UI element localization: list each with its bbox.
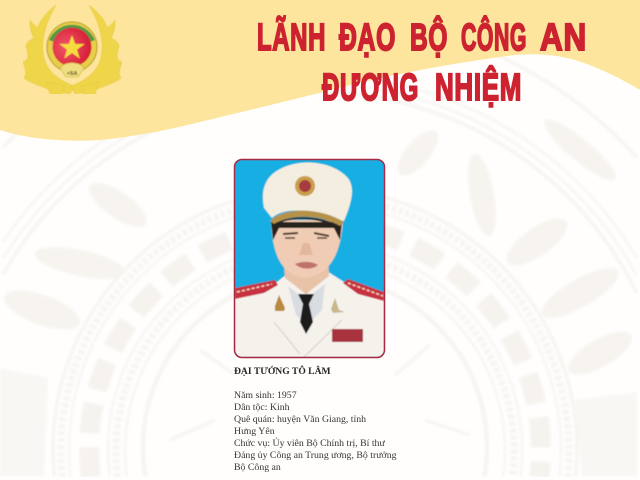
photo backdrop (234, 160, 384, 358)
photo border (234, 160, 384, 358)
title line 1: BỘ (410, 14, 448, 59)
biography text: Dân tộc: Kinh (234, 402, 290, 413)
title line 1: AN (540, 17, 587, 59)
name heading: ĐẠI TƯỚNG TÔ LÂM (234, 366, 331, 377)
biography text: Bộ Công an (234, 462, 281, 473)
cap badge (295, 176, 315, 196)
neck (283, 266, 330, 294)
nose and mouth (299, 243, 313, 255)
title line 1: LÃNH (257, 15, 326, 59)
peaked cap (263, 162, 352, 221)
title line 1: CÔNG (461, 14, 527, 59)
title line 2: NHIỆM (435, 65, 522, 109)
hair (271, 222, 342, 240)
collar badges (275, 295, 285, 311)
drum corner panels (0, 368, 637, 477)
emblem ring (47, 22, 97, 72)
title line 1: ĐẠO (339, 17, 396, 59)
title (257, 14, 587, 109)
drum birds (0, 112, 638, 383)
lapels (274, 320, 342, 357)
icon: police emblem: +SA (67, 71, 77, 77)
face (271, 220, 343, 278)
emblem wreath (23, 5, 122, 94)
photo image (234, 160, 384, 358)
portrait photo (234, 160, 384, 358)
biography text: Hưng Yên (234, 426, 275, 437)
eyes and brows (283, 233, 329, 236)
emblem base (60, 63, 84, 77)
biography text: Năm sinh: 1957 (234, 390, 297, 401)
uniform jacket (235, 268, 384, 357)
emblem red disc (52, 28, 92, 66)
title line 1 (257, 14, 587, 59)
shirt and tie (288, 284, 325, 320)
biography text: Chức vụ: Ủy viên Bộ Chính trị, Bí thư (234, 438, 385, 449)
title line 2: ĐƯƠNG (322, 67, 419, 109)
biography text: Đảng ủy Công an Trung ương, Bộ trưởng (234, 450, 396, 461)
header: yellow wave (0, 0, 640, 141)
biography text: Quê quán: huyện Văn Giang, tỉnh (234, 414, 366, 425)
icon: police emblem (23, 5, 122, 94)
shoulder boards (235, 279, 384, 301)
medal ribbons (332, 329, 363, 342)
biography text (234, 390, 396, 473)
emblem star (59, 35, 85, 59)
